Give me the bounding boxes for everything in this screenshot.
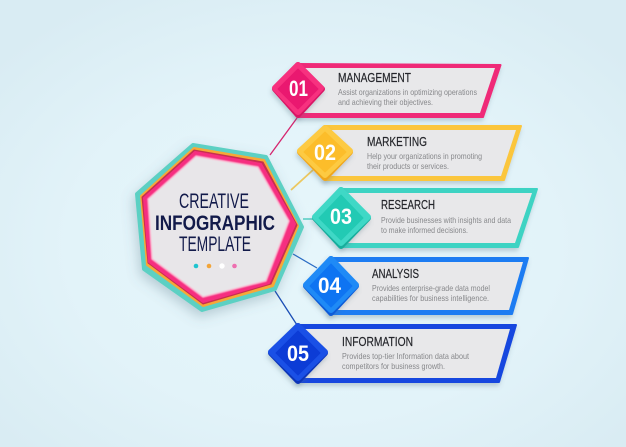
description (381, 215, 511, 235)
card frame (330, 258, 528, 314)
number: 03 (330, 204, 352, 229)
number: 01 (289, 76, 308, 101)
description: Provide businesses with insights and data (381, 215, 511, 225)
heading: MARKETING (367, 134, 427, 149)
description: Provides top-tier Information data about (342, 351, 470, 361)
panel: 03 research (315, 189, 537, 247)
card body (325, 130, 516, 176)
hub dots (194, 263, 237, 269)
description: capabilities for business intelligence. (372, 293, 489, 303)
card body (342, 193, 532, 243)
number: 04 (318, 273, 342, 298)
diamond badge (271, 326, 325, 381)
connector: 04 to hub (293, 254, 317, 268)
hub orange ring (141, 148, 298, 306)
hub title: INFOGRAPHIC (155, 212, 275, 235)
number: 02 (314, 140, 336, 165)
card frame (325, 126, 521, 180)
connector: 05 to hub (275, 291, 297, 325)
description: Assist organizations in optimizing operations (338, 87, 477, 97)
description (372, 283, 490, 303)
panel: 01 management (275, 64, 500, 117)
hub pink ring (144, 152, 295, 302)
diamond badge (275, 65, 322, 115)
heading: INFORMATION (342, 334, 413, 349)
heading: RESEARCH (381, 197, 435, 212)
hub title: TEMPLATE (179, 233, 251, 256)
card frame (342, 189, 537, 247)
number: 05 (287, 341, 309, 366)
card frame (298, 64, 500, 117)
connector: 01 to hub (270, 118, 297, 155)
connector: 02 to hub (291, 170, 313, 190)
panel: 02 marketing (300, 126, 521, 180)
description (342, 351, 470, 371)
diamond badge (315, 190, 368, 246)
hub outer teal ring (137, 145, 302, 310)
connector: 03 to hub (303, 218, 314, 220)
hub title (155, 190, 275, 256)
diamond badge (300, 128, 350, 178)
heading: MANAGEMENT (338, 70, 411, 85)
central heptagon hub (137, 145, 302, 310)
description: Help your organizations in promoting (367, 151, 482, 161)
description: their products or services. (367, 161, 449, 171)
card body (298, 329, 510, 378)
panel: 04 analysis (306, 258, 528, 314)
description: Provides enterprise-grade data model (372, 283, 490, 293)
card frame (298, 325, 516, 382)
card body (298, 68, 495, 113)
description (338, 87, 477, 107)
description: and achieving their objectives. (338, 97, 433, 107)
description: competitors for business growth. (342, 361, 445, 371)
panel: 05 information (271, 325, 516, 382)
description (367, 151, 482, 171)
hub title: CREATIVE (179, 190, 249, 213)
card body (330, 262, 523, 310)
hub inner panel (148, 156, 289, 297)
diamond badge (306, 259, 356, 313)
heading: ANALYSIS (372, 266, 419, 281)
description: to make informed decisions. (381, 225, 468, 235)
hub dark red line (142, 150, 297, 304)
